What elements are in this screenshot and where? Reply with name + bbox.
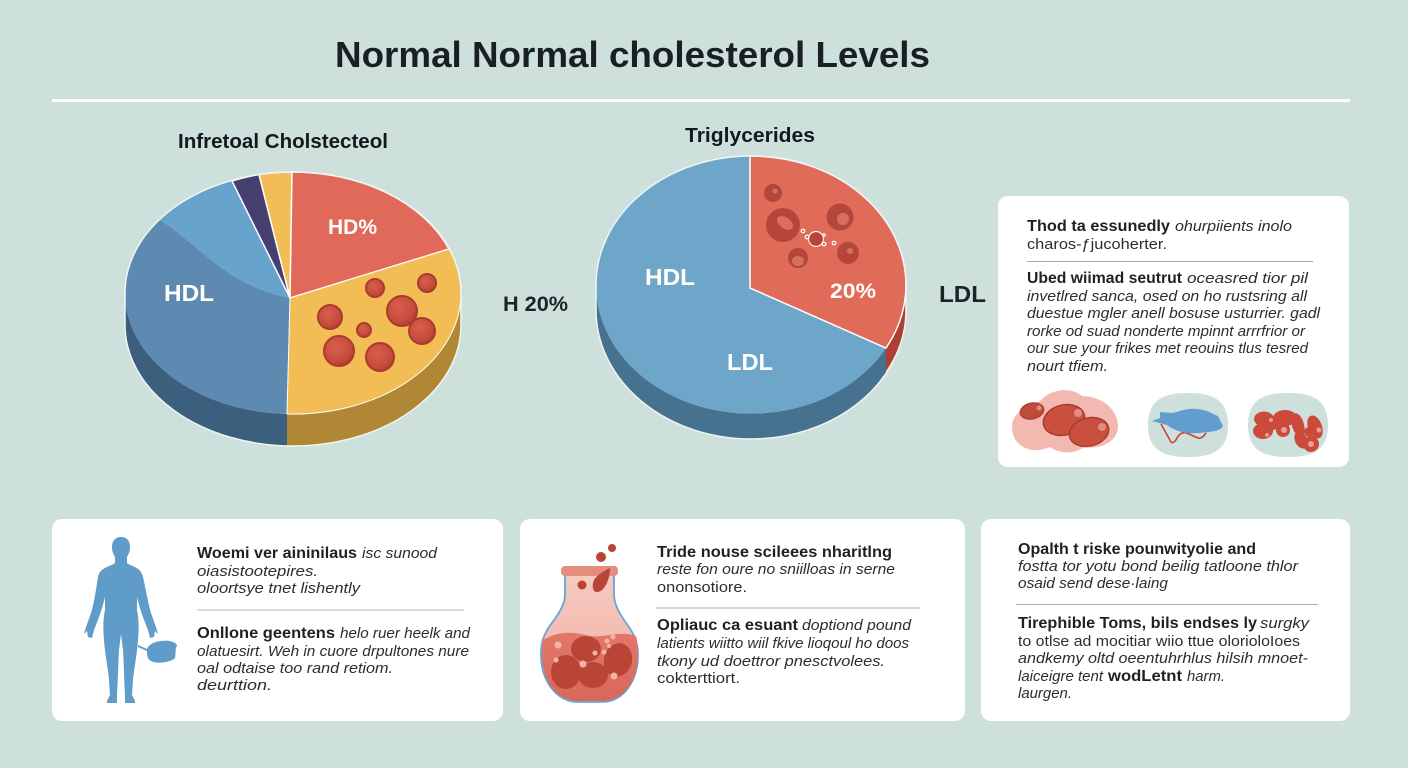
panel text: oal odtaise too rand retiom. (197, 660, 393, 677)
panel text: fostta tor yotu bond beilig tatloone thlor (1018, 558, 1299, 575)
molecule detail (801, 229, 836, 246)
panel: explanation with icons (998, 196, 1349, 467)
panel text: oloortsye tnet lishently (197, 580, 362, 597)
panel text: oiasistootepires. (197, 563, 318, 580)
panel text: Opalth t riske pounwityolie and (1018, 541, 1256, 558)
panel text: wodLetnt (1107, 668, 1182, 685)
pie side: red (886, 285, 906, 371)
panel text (197, 545, 471, 694)
triglyceride particles (764, 184, 859, 268)
slice: light blue (160, 180, 290, 298)
panel text: isc sunood (362, 545, 438, 562)
panel: triglyceride flask (520, 519, 965, 721)
slice: small yellow (259, 172, 292, 298)
particle highlights (772, 188, 853, 266)
panel text: deurttion. (197, 677, 272, 694)
panel text: charos-ƒjucoherter. (1027, 236, 1167, 253)
icon: flask (541, 544, 638, 702)
slice: HDL dark blue (125, 220, 290, 414)
panel text: helo ruer heelk and (340, 625, 471, 642)
pie outline (125, 172, 461, 446)
icon: artery with blue deposit (1148, 393, 1228, 457)
pie side: blue (596, 285, 886, 439)
panel text: Ubed wiimad seutrut (1027, 270, 1182, 287)
panel text: duestue mgler anell bosuse usturrier. gadl (1027, 305, 1321, 322)
panel text: Tirephible Toms, bils endses ly (1018, 615, 1257, 632)
pie heading: Triglycerides (685, 125, 815, 147)
cholesterol particles (318, 274, 436, 371)
panel text: laurgen. (1018, 685, 1072, 702)
panel card (998, 196, 1349, 467)
panel text: harm. (1187, 668, 1225, 685)
slice: purple (232, 174, 290, 298)
panel text: to otlse ad mocitiar wiio ttue olorioloIoes (1018, 633, 1300, 650)
panel text: cokterttiort. (657, 670, 740, 687)
icon: red cell cluster (1248, 393, 1328, 457)
pie side: blue (125, 293, 287, 446)
panel text: Onllone geentens (197, 625, 335, 642)
panel text (1027, 218, 1321, 375)
panel text: osaid send dese·laing (1018, 575, 1169, 592)
panel text: Woemi ver aininilaus (197, 545, 357, 562)
pie chart: cholesterol (125, 131, 461, 446)
panel card (52, 519, 503, 721)
label: LDL: LDL (939, 281, 986, 307)
slice: yellow (287, 249, 461, 414)
panel text: andkemy oltd oeentuhrhlus hilsih mnoet- (1018, 650, 1308, 667)
panel text: oceasred tior pil (1187, 270, 1309, 287)
panel text: latients wiitto wiil fkive lioqoul ho doos (657, 635, 909, 652)
label: HD%: HD% (328, 216, 377, 239)
slice: red (750, 156, 906, 348)
panel text: tkony ud doettror pnesctvolees. (657, 653, 885, 670)
panel text: ohurpiients inolo (1175, 218, 1292, 235)
slice: red (290, 172, 449, 298)
panel: risk text (981, 519, 1350, 721)
panel text: nourt tfiem. (1027, 358, 1108, 375)
icon: red cells on pink blob (1012, 390, 1118, 452)
title: Normal Normal cholesterol Levels (335, 34, 930, 75)
panel text: our sue your frikes met reouins tlus tesred (1027, 340, 1309, 357)
panel text: ononsotiore. (657, 579, 747, 596)
label: HDL: HDL (164, 280, 214, 306)
panel text: Opliauc ca esuant (657, 617, 798, 634)
panel text: Thod ta essunedly (1027, 218, 1170, 235)
panel text (656, 544, 920, 687)
icon: human figure with organ (84, 537, 177, 703)
panel: body health (52, 519, 503, 721)
pie side: yellow (287, 293, 461, 446)
panel card (981, 519, 1350, 721)
panel card (520, 519, 965, 721)
label: 20%: 20% (830, 280, 876, 303)
label: LDL: LDL (727, 349, 773, 375)
panel text (1016, 541, 1318, 702)
pie heading: Infretoal Cholstecteol (178, 131, 388, 153)
panel text: rorke od suad nonderte mpinnt arrrfrior or (1027, 323, 1306, 340)
icon: organ beside figure (138, 641, 177, 663)
panel text: reste fon oure no sniilloas in serne (657, 561, 895, 578)
label: H 20%: H 20% (503, 293, 568, 316)
panel text: Tride nouse scileees nharitlng (657, 544, 892, 561)
slice: blue (596, 156, 886, 414)
label: HDL: HDL (645, 264, 695, 290)
panel text: laiceigre tent (1018, 668, 1104, 685)
panel text: invetlred sanca, osed on ho rustsring all (1027, 288, 1308, 305)
pie outline (596, 156, 906, 439)
panel text: surgky (1260, 615, 1311, 632)
pie chart: triglycerides (596, 125, 906, 439)
panel text: doptiond pound (802, 617, 912, 634)
panel text: olatuesirt. Weh in cuore drpultones nure (197, 643, 469, 660)
